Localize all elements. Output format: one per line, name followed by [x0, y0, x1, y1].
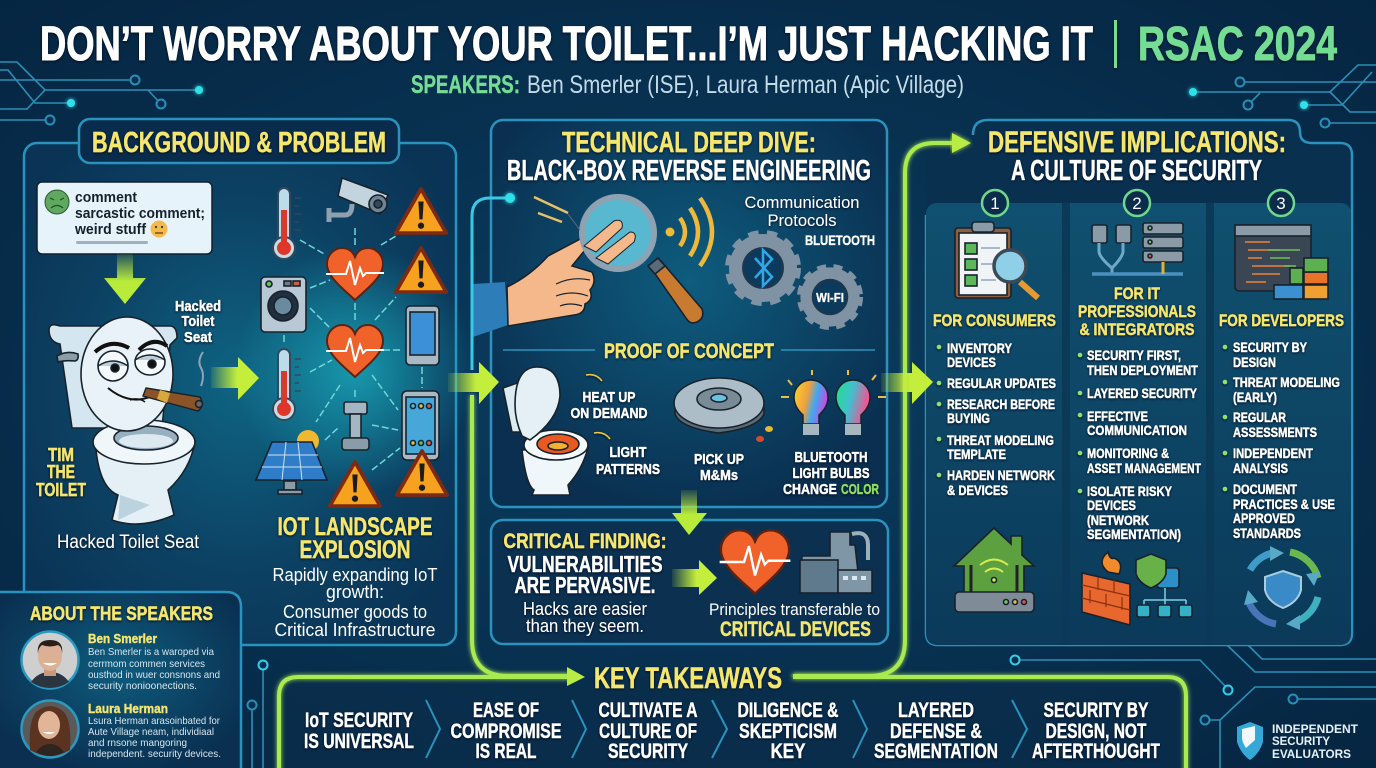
takeaway 5	[874, 699, 998, 763]
IoT burst glow	[235, 245, 475, 495]
label: heat up on demand: HEAT UP	[582, 389, 636, 406]
icon: heart	[326, 325, 384, 377]
icon: warning	[396, 189, 446, 233]
bullet list: STANDARDS	[1233, 525, 1301, 541]
photo: Laura Herman	[22, 700, 78, 758]
heading pill: BACKGROUND & PROBLEM	[92, 127, 386, 159]
text: transferable principles: CRITICAL DEVICES	[720, 618, 871, 641]
takeaway 1: IoT SECURITY	[305, 709, 413, 732]
chevrons	[426, 700, 1027, 758]
speakers subtitle: Ben Smerler (ISE), Laura Herman (Apic Village)	[527, 71, 964, 99]
text: critical finding: than they seem.	[526, 616, 644, 636]
label: communication protocols	[744, 193, 860, 230]
panel: background and problem	[24, 119, 475, 645]
icon: tablet	[406, 306, 439, 365]
bullet list: ANALYSIS	[1233, 460, 1288, 476]
bio: Ben Smerler: ousthod in wuer consnons and	[88, 669, 220, 681]
heading: IoT landscape explosion: IOT LANDSCAPE	[278, 513, 432, 541]
label: bulbs: LIGHT BULBS	[792, 465, 870, 482]
bullet list: COMMUNICATION	[1087, 422, 1187, 438]
comment bubble: sarcastic comment;	[75, 205, 205, 222]
circuit traces: bottom left	[248, 660, 268, 768]
subheading: & INTEGRATORS	[1080, 320, 1194, 339]
bio: Ben Smerler: cerrmom commen services	[88, 658, 205, 670]
bullet list	[937, 340, 1056, 498]
circuit traces: top right	[1189, 65, 1376, 128]
heading: TECHNICAL DEEP DIVE:	[562, 127, 816, 159]
bullet list: PRACTICES & USE	[1233, 496, 1335, 512]
icon: smartphone	[402, 391, 439, 460]
bullet list: BUYING	[947, 410, 990, 426]
bullet list: TEMPLATE	[947, 446, 1006, 462]
arrow: proof of concept to finding	[672, 490, 707, 535]
label: hacked toilet seat callout: Toilet	[182, 313, 214, 330]
step number 2	[1124, 190, 1150, 216]
label: Tim the toilet: THE	[47, 462, 75, 482]
arrow: toilet to IoT	[211, 357, 259, 400]
label: communication protocols: Communication	[744, 193, 860, 212]
heading: KEY TAKEAWAYS	[594, 662, 782, 695]
text: transferable principles: Principles transferable to	[709, 600, 880, 619]
circuit traces: top left	[0, 62, 203, 124]
label: bluetooth: BLUETOOTH	[805, 232, 875, 248]
comment bubble: comment	[75, 189, 137, 206]
panel: technical deep dive	[473, 120, 887, 507]
takeaway 3: SECURITY	[608, 740, 688, 763]
circuit traces: bottom right	[1010, 645, 1376, 768]
icon: hand with magnifying glass	[473, 197, 703, 337]
subheading: FOR IT	[1114, 284, 1161, 303]
icon: cables and servers	[1092, 223, 1183, 274]
bio: Ben Smerler: Ben Smerler	[88, 631, 157, 646]
logo: Independent Security Evaluators: INDEPENDENT	[1272, 724, 1358, 736]
panel: critical finding	[491, 520, 888, 644]
text: critical finding: VULNERABILITIES	[508, 551, 662, 577]
bullet list	[1078, 347, 1201, 542]
label: hacked toilet seat callout	[175, 298, 221, 346]
takeaway 1: IS UNIVERSAL	[304, 730, 414, 753]
bullet list: APPROVED	[1233, 510, 1295, 526]
text: IoT growth description: Rapidly expanding IoT	[272, 564, 438, 585]
text: critical finding: ARE PERVASIVE.	[514, 572, 656, 598]
bullet list: THREAT MODELING	[947, 432, 1054, 448]
label: pick up M&amp;Ms: M&Ms	[700, 467, 738, 484]
bullet list: DEVICES	[1087, 497, 1136, 513]
label: hacked toilet seat: Hacked Toilet Seat	[57, 532, 200, 553]
label: bulbs: CHANGE	[783, 481, 837, 498]
icon: gear with Wi-Fi	[800, 267, 860, 327]
logo: Independent Security Evaluators: EVALUATORS	[1272, 749, 1351, 761]
bio: Ben Smerler: security nonioonections.	[88, 680, 197, 692]
bullet list: MONITORING &	[1087, 445, 1169, 461]
text: critical finding	[504, 530, 666, 636]
column: for IT professionals	[1070, 190, 1206, 645]
icon: cigar smoke	[199, 352, 203, 386]
panel: defensive implications	[926, 120, 1352, 645]
heading: A CULTURE OF SECURITY	[1011, 155, 1262, 187]
bullet list: SEGMENTATION)	[1087, 526, 1181, 542]
bio: Laura Herman: independent. security devices.	[88, 748, 221, 760]
subheading: FOR CONSUMERS	[933, 311, 1056, 330]
icon: color-changing bulbs	[781, 370, 886, 435]
icon: code window and blocks	[1235, 225, 1328, 299]
arrow: finding to devices	[672, 560, 717, 595]
connector: defensive to key takeaways	[793, 143, 955, 676]
bullet list: RESEARCH BEFORE	[947, 396, 1055, 412]
panel: about the speakers	[0, 592, 241, 768]
text: IoT growth description: growth:	[326, 581, 384, 602]
icon: thermometer	[273, 349, 301, 420]
bio: Laura Herman: Lsura Herman arasoinbated for	[88, 715, 220, 727]
bullet list: DESIGN	[1233, 354, 1276, 370]
icon: solar panel	[256, 442, 327, 494]
label: Tim the toilet: TOILET	[36, 480, 86, 500]
icon: demo toilet	[503, 367, 588, 495]
text: critical finding: CRITICAL FINDING:	[504, 530, 666, 553]
takeaway 5: LAYERED	[898, 699, 974, 722]
bullet list: THEN DEPLOYMENT	[1087, 362, 1198, 378]
speakers subtitle	[411, 71, 964, 99]
icon: warning	[396, 248, 446, 292]
bullet list: LAYERED SECURITY	[1087, 385, 1198, 401]
bullet list: DOCUMENT	[1233, 481, 1297, 497]
icon: heart	[326, 248, 384, 300]
icon: robot device	[342, 402, 369, 450]
takeaway 4: KEY	[770, 740, 806, 763]
label: hacked toilet seat callout: Seat	[184, 329, 212, 346]
icon: wireless signal	[666, 198, 712, 266]
heading: BLACK-BOX REVERSE ENGINEERING	[507, 155, 871, 187]
heading	[507, 127, 871, 187]
takeaway 3: CULTURE OF	[599, 720, 697, 743]
label: communication protocols: Protocols	[768, 211, 836, 230]
label: hacked toilet seat callout: Hacked	[175, 298, 221, 315]
bullet list: INVENTORY	[947, 340, 1013, 356]
takeaway 4	[738, 699, 838, 763]
arrow: IoT to technical	[448, 362, 499, 404]
label: light patterns: LIGHT	[610, 444, 646, 461]
heading pill	[79, 119, 399, 163]
text: IoT growth description	[272, 564, 438, 640]
bio: Ben Smerler	[88, 631, 220, 692]
bullet list: DEVICES	[947, 354, 996, 370]
step number 2: 2	[1132, 194, 1142, 213]
subheading: FOR DEVELOPERS	[1219, 311, 1344, 330]
step number 1: 1	[990, 194, 1000, 213]
label: Tim the toilet: TIM	[48, 445, 74, 465]
bullet list: ISOLATE RISKY	[1087, 483, 1173, 499]
photo: Ben Smerler	[22, 632, 78, 688]
icon: gear with Wi-Fi: WI-FI	[816, 290, 844, 305]
icon: warning	[330, 462, 380, 506]
label: light patterns	[594, 433, 660, 478]
heading: ABOUT THE SPEAKERS	[30, 603, 213, 625]
takeaway 2: EASE OF	[473, 699, 539, 722]
bullet list: (NETWORK	[1087, 512, 1149, 528]
comment bubble	[37, 182, 212, 254]
bio: Laura Herman	[88, 701, 221, 760]
label: bulbs: COLOR	[841, 481, 879, 498]
bullet list: SECURITY FIRST,	[1087, 347, 1181, 363]
subheading: PROFESSIONALS	[1078, 302, 1196, 321]
text: transferable principles	[709, 600, 880, 641]
icon: factory	[800, 532, 872, 593]
text: critical finding: Hacks are easier	[523, 599, 647, 619]
bullet list: REGULAR	[1233, 409, 1286, 425]
label: heat up on demand	[570, 375, 648, 422]
icon: home router	[954, 528, 1034, 612]
speakers subtitle: SPEAKERS:	[411, 71, 520, 99]
icon: security camera	[329, 178, 388, 222]
step number 3: 3	[1276, 194, 1286, 213]
takeaway 5: SEGMENTATION	[874, 740, 998, 763]
takeaway 3: CULTIVATE A	[598, 699, 698, 722]
icon: heart	[720, 530, 790, 594]
text: IoT growth description: Critical Infrastructure	[274, 619, 436, 640]
logo: Independent Security Evaluators: SECURITY	[1272, 736, 1330, 748]
bullet list: & DEVICES	[947, 482, 1008, 498]
comment bubble: weird stuff	[74, 221, 147, 238]
takeaway 2: COMPROMISE	[450, 720, 562, 743]
icon: robot vacuum with M&amp;Ms	[674, 378, 773, 442]
bullet list: ASSESSMENTS	[1233, 424, 1317, 440]
icon: thermometer	[273, 188, 301, 259]
takeaway 5: DEFENSE &	[890, 720, 982, 743]
text: IoT growth description: Consumer goods to	[283, 601, 427, 622]
bullet list	[1223, 339, 1340, 541]
column: for consumers	[926, 190, 1062, 645]
takeaway 6: DESIGN, NOT	[1046, 720, 1147, 743]
arrowhead: to defensive panel	[952, 133, 971, 153]
takeaway 3	[598, 699, 698, 763]
arrow: bubble to toilet	[104, 254, 146, 304]
icon: washing machine	[261, 277, 306, 332]
label: Tim the toilet	[36, 445, 86, 500]
arrow: technical to defensive	[881, 362, 933, 404]
icon: gear with Bluetooth	[729, 234, 797, 302]
label: pick up M&amp;Ms	[694, 451, 744, 484]
bio: Laura Herman: and rnsone mangoring	[88, 737, 187, 749]
bio: Laura Herman: Aute Village neam, individiaal	[88, 726, 214, 738]
heading	[988, 126, 1286, 187]
icon: shield and network	[1136, 554, 1192, 617]
bullet list: (EARLY)	[1233, 389, 1277, 405]
column: for developers	[1214, 190, 1351, 645]
label: bulbs: BLUETOOTH	[794, 449, 868, 466]
heading: IoT landscape explosion	[278, 513, 432, 564]
bullet list: HARDEN NETWORK	[947, 467, 1055, 483]
takeaway 4: SKEPTICISM	[739, 720, 837, 743]
connector: reverse engineering cyan link	[472, 193, 515, 370]
icon: Tim the toilet	[49, 317, 202, 524]
icon: firewall	[1082, 552, 1130, 625]
step number 1	[982, 190, 1008, 216]
arrowhead	[567, 667, 585, 686]
bullet list: THREAT MODELING	[1233, 374, 1340, 390]
takeaway 6: AFTERTHOUGHT	[1032, 740, 1160, 763]
bullet list: ASSET MANAGEMENT	[1087, 460, 1201, 476]
icon: checklist with magnifier	[955, 222, 1038, 298]
connector lines	[284, 228, 422, 470]
icon: security lifecycle shield	[1244, 546, 1320, 630]
label: bulbs	[783, 449, 879, 498]
label: heat up on demand: ON DEMAND	[570, 405, 648, 422]
bullet list: EFFECTIVE	[1087, 408, 1148, 424]
takeaway 4: DILIGENCE &	[738, 699, 838, 722]
panel: key takeaways	[279, 662, 1186, 768]
bio: Laura Herman: Laura Herman	[88, 701, 168, 716]
icon: warning	[397, 451, 447, 495]
step number 3	[1268, 190, 1294, 216]
heading: IoT landscape explosion: EXPLOSION	[300, 536, 410, 564]
label: light patterns: PATTERNS	[596, 461, 660, 478]
bullet list: INDEPENDENT	[1233, 445, 1313, 461]
logo: Independent Security Evaluators	[1237, 722, 1358, 761]
takeaway 2	[450, 699, 562, 763]
bullet list: SECURITY BY	[1233, 339, 1308, 355]
bio: Ben Smerler: Ben Smerler is a waroped via	[88, 646, 214, 658]
takeaway 6: SECURITY BY	[1044, 699, 1148, 722]
connector: technical to key takeaways	[472, 395, 570, 676]
takeaway 1	[304, 709, 414, 753]
bullet list: REGULAR UPDATES	[947, 375, 1056, 391]
IoT device network	[256, 178, 447, 506]
subheading	[1078, 284, 1196, 339]
icon: sun	[297, 430, 319, 452]
takeaway 6	[1032, 699, 1160, 763]
label: pick up M&amp;Ms: PICK UP	[694, 451, 744, 468]
takeaway 2: IS REAL	[476, 740, 537, 763]
heading: proof of concept: PROOF OF CONCEPT	[604, 340, 774, 363]
